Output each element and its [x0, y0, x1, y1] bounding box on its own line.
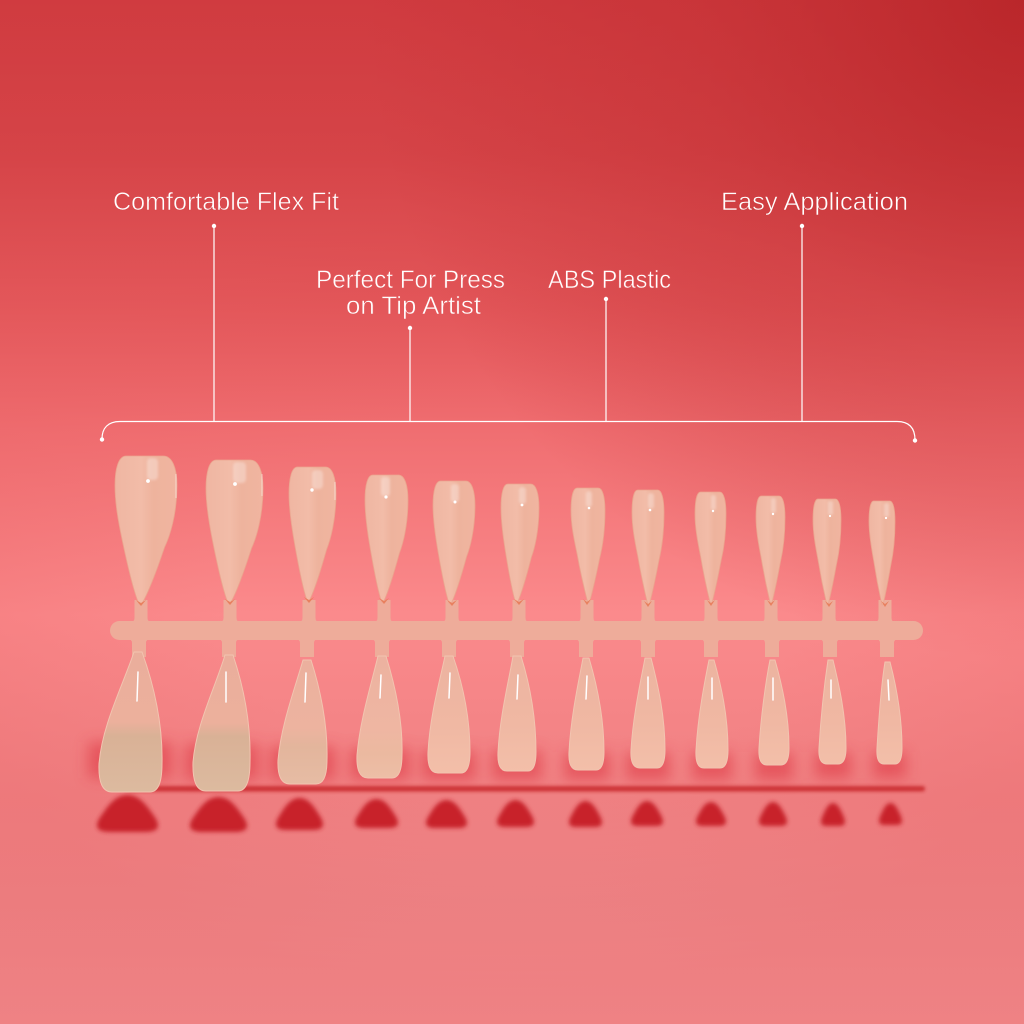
label: Perfect For Press on Tip Artist — [316, 266, 505, 320]
bracket with leader lines — [100, 224, 917, 443]
triangular shadows of nails — [97, 795, 902, 832]
gloss lines on lower nails — [137, 672, 889, 702]
gloss highlights on upper nails — [146, 458, 889, 519]
label: Comfortable Flex Fit: Comfortable Flex Fit — [113, 188, 339, 216]
nail tip runner bar with stems — [110, 600, 923, 657]
upper row of nail tips — [115, 456, 895, 605]
lower row of nail tips — [99, 652, 902, 792]
label: Easy Application: Easy Application — [721, 188, 908, 216]
soft shadows behind lower nails — [88, 742, 906, 780]
orange tip notches on upper nails — [136, 597, 889, 607]
label: Perfect For Press on Tip Artist: Perfect For Press — [316, 266, 505, 294]
label: ABS Plastic: ABS Plastic — [548, 266, 671, 294]
shadow line of the bar — [125, 786, 925, 792]
label: Perfect For Press on Tip Artist: on Tip Artist — [346, 292, 481, 320]
